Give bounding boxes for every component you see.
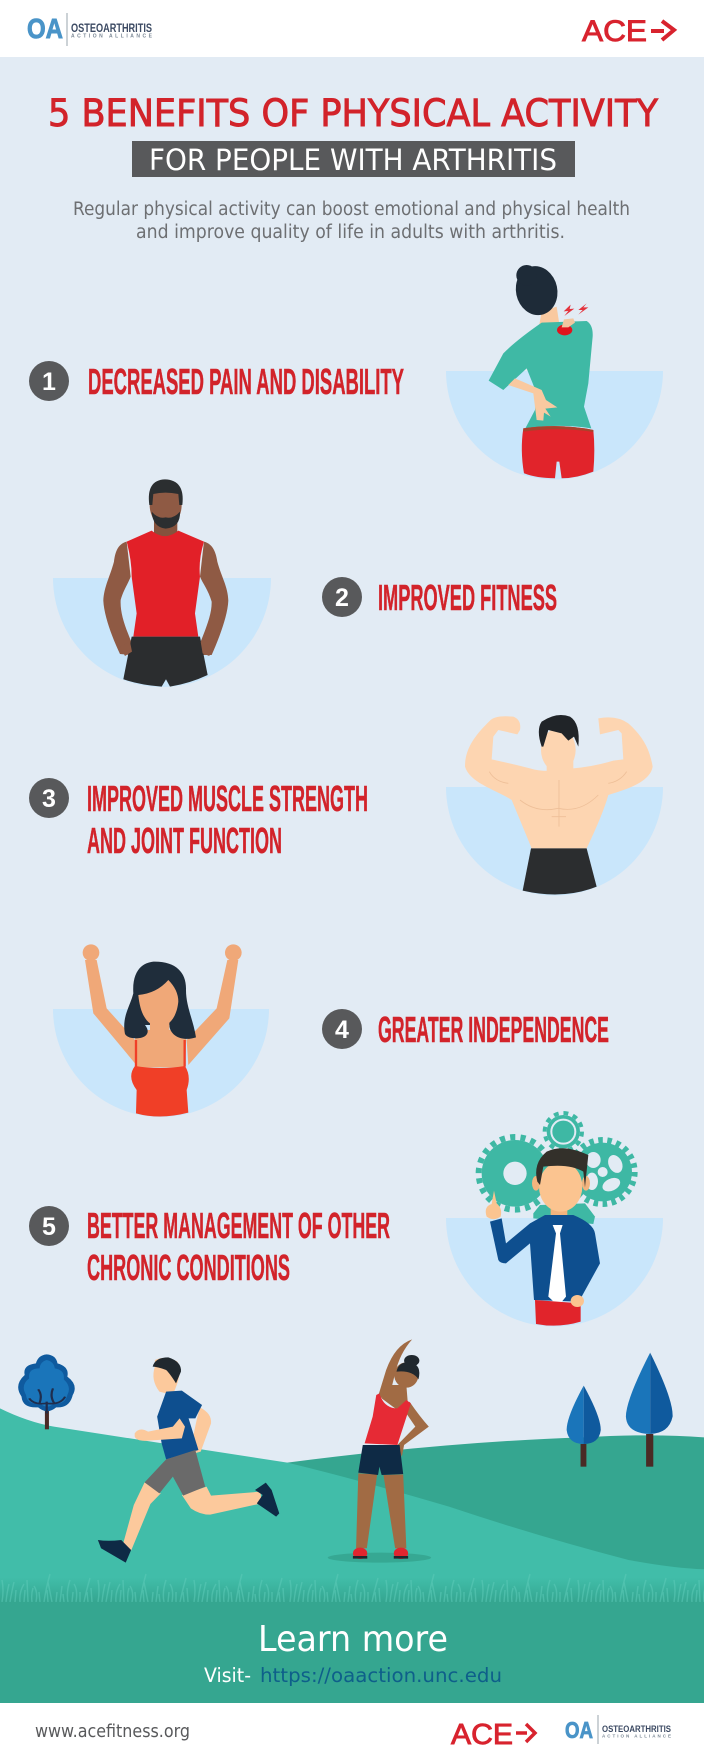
large pine tree <box>626 1353 673 1467</box>
benefit 2 heading: 2 <box>335 584 349 612</box>
footer logo: Osteoarthritis Action Alliance: OSTEOARTHRITIS <box>602 1724 671 1735</box>
benefit 2 heading <box>322 577 557 618</box>
logo: ACE: ACE <box>582 15 647 48</box>
stretching woman <box>328 1339 431 1563</box>
intro text: and improve quality of life in adults with arthritis. <box>136 222 565 243</box>
top header bar <box>0 0 704 57</box>
benefit 3 heading: 3 <box>42 785 56 813</box>
grass strip and learn-more band <box>0 1570 704 1703</box>
benefit 4 heading <box>322 1009 609 1050</box>
benefit 1 heading: 1 <box>42 368 56 396</box>
benefit 5 heading <box>29 1205 390 1288</box>
logo: Osteoarthritis Action Alliance: ACTION ALLIANCE <box>71 34 153 40</box>
footer logo: Osteoarthritis Action Alliance: ACTION ALLIANCE <box>602 1734 671 1738</box>
logo: Osteoarthritis Action Alliance: OA <box>27 13 63 44</box>
illustration 5: man with gears <box>446 1113 663 1326</box>
hill: front <box>0 1408 704 1620</box>
illustration 2: fit man in red tank top <box>53 479 271 687</box>
illustration 4: woman raising arms <box>53 944 269 1117</box>
logo: ACE <box>582 15 674 48</box>
website: www.acefitness.org <box>35 1722 190 1742</box>
benefit 4 heading: 4 <box>335 1016 349 1044</box>
subtitle banner: FOR PEOPLE WITH ARTHRITIS <box>149 143 557 177</box>
logo: Osteoarthritis Action Alliance <box>27 13 153 46</box>
round tree <box>18 1354 75 1429</box>
benefit 1 heading <box>29 361 404 402</box>
visit link: https://oaaction.unc.edu <box>260 1664 502 1687</box>
intro text: Regular physical activity can boost emotional and physical health <box>73 199 630 220</box>
benefit 5 heading: 5 <box>42 1213 56 1241</box>
benefit 3 heading: AND JOINT FUNCTION <box>87 820 282 861</box>
infographic canvas: IMPROVED MUSCLE STRENGTH <box>87 778 368 819</box>
benefit 1 heading: DECREASED PAIN AND DISABILITY <box>88 361 404 402</box>
logo: Osteoarthritis Action Alliance: OSTEOARTHRITIS <box>71 23 152 35</box>
title: 5 BENEFITS OF PHYSICAL ACTIVITY <box>48 92 658 135</box>
runner <box>98 1357 279 1563</box>
benefit 3 heading <box>29 778 368 861</box>
landscape with hills <box>0 1339 704 1620</box>
gears <box>479 1113 635 1224</box>
infographic canvas: BETTER MANAGEMENT OF OTHER <box>87 1205 390 1246</box>
footer logo: Osteoarthritis Action Alliance <box>565 1715 671 1744</box>
hill: back <box>287 1435 704 1620</box>
footer bar <box>0 1703 704 1758</box>
illustration 1: woman with back pain <box>446 262 663 480</box>
benefit 5 heading: CHRONIC CONDITIONS <box>87 1247 290 1288</box>
illustration 3: flexing muscular man <box>446 715 663 896</box>
footer logo: ACE: ACE <box>451 1719 513 1751</box>
small pine tree <box>567 1386 601 1467</box>
visit link: Visit- <box>204 1664 251 1687</box>
intro text <box>73 199 630 243</box>
learn more heading: Learn more <box>258 1619 448 1660</box>
footer logo: Osteoarthritis Action Alliance: OA <box>565 1717 593 1743</box>
